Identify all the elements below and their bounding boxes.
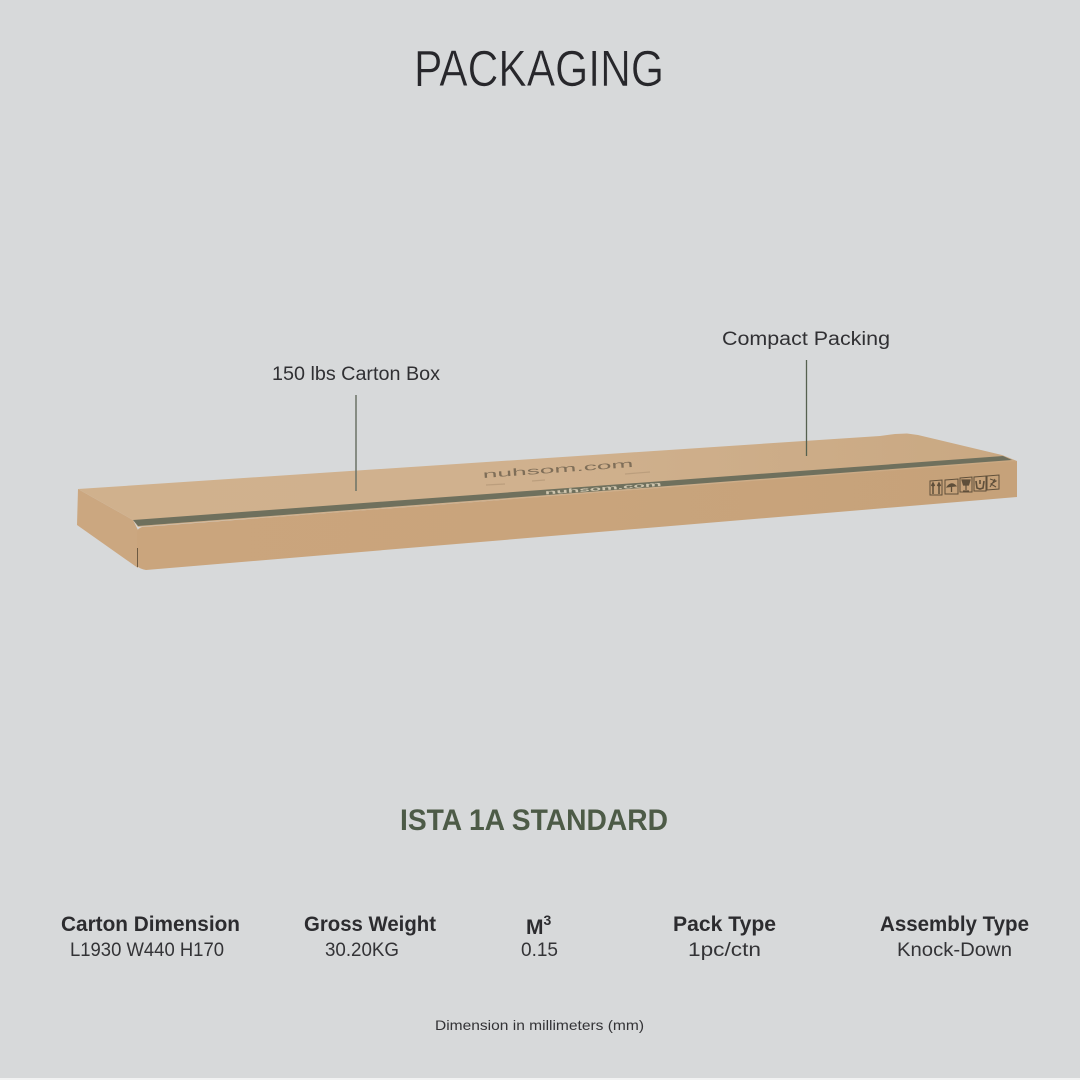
- spec: M3: M: [526, 916, 544, 939]
- icon: handle with care: [974, 476, 986, 491]
- spec: Assembly Type: Assembly Type: [880, 913, 1029, 936]
- spec: Pack Type: [673, 913, 776, 961]
- title: PACKAGING: [414, 40, 664, 97]
- icon: temperature: [987, 475, 999, 490]
- spec: Pack Type: 1pc/ctn: [688, 940, 761, 961]
- footnote: Dimension in millimeters (mm): [435, 1017, 644, 1033]
- icon: keep dry: [945, 479, 958, 494]
- spec: Pack Type: Pack Type: [673, 913, 776, 936]
- spec: Assembly Type: Knock-Down: [897, 940, 1012, 961]
- spec: M3: 3: [544, 912, 552, 928]
- heading: ISTA 1A STANDARD: ISTA 1A STANDARD: [400, 804, 668, 837]
- handling icons: [930, 475, 999, 495]
- green tape strip: [133, 456, 1012, 526]
- front corner seam: [136, 548, 138, 567]
- spec: Assembly Type: [880, 913, 1029, 961]
- spec: Carton Dimension: Carton Dimension: [61, 913, 240, 936]
- spec: Gross Weight: 30.20KG: [325, 940, 399, 961]
- icon: this way up: [930, 480, 942, 495]
- logo on tape: nuhsom.com: [545, 481, 662, 496]
- carton box: [77, 434, 1017, 570]
- callout: Compact Packing: Compact Packing: [722, 329, 890, 350]
- logo on top face: nuhsom.com: [482, 458, 634, 480]
- front face: [137, 461, 1017, 570]
- spec: Carton Dimension: [61, 913, 240, 961]
- icon: fragile: [960, 477, 972, 492]
- spec: Gross Weight: [304, 913, 436, 961]
- spec: M3: [521, 912, 558, 961]
- callout: 150 lbs Carton Box: 150 lbs Carton Box: [272, 364, 441, 385]
- faint print under logo: [486, 472, 650, 485]
- spec: Gross Weight: Gross Weight: [304, 913, 436, 936]
- top face: [78, 434, 1017, 527]
- spec: M3: 0.15: [521, 940, 558, 961]
- spec: Carton Dimension: L1930 W440 H170: [70, 940, 224, 961]
- left end flap: [77, 489, 138, 568]
